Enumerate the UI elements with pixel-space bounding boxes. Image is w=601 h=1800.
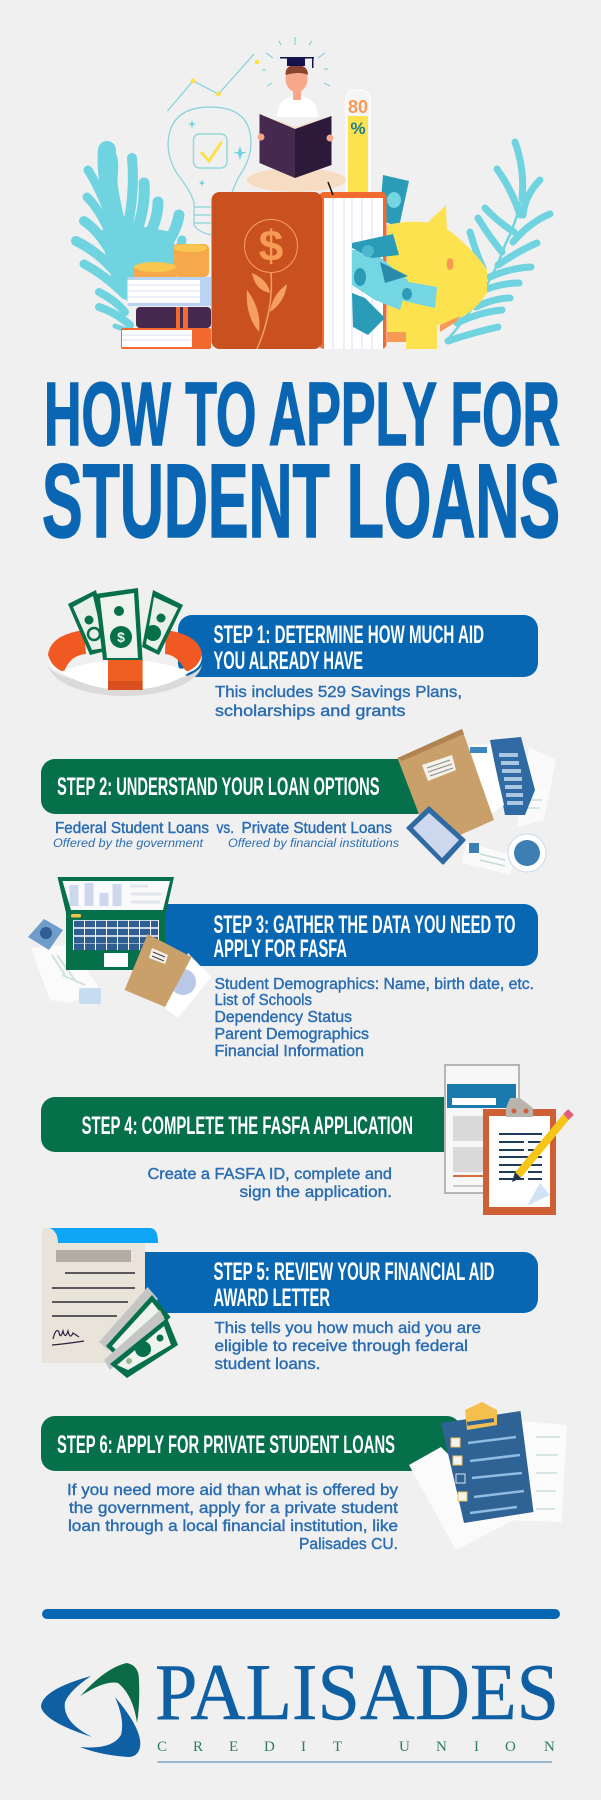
comparison text: Private Student Loans: [242, 820, 392, 837]
body text: the government, apply for a private student: [69, 1500, 399, 1517]
icon: stack of books and coins: [121, 244, 211, 349]
icon: score tube: 80: [348, 97, 368, 117]
body text: student loans.: [214, 1356, 320, 1373]
tagline: CREDITUNION: [157, 1739, 555, 1755]
icon: lightbulb: [168, 107, 251, 235]
heading bar: [145, 1252, 538, 1313]
icon: money bills: [352, 234, 437, 335]
body list: Dependency Status: [214, 1009, 352, 1026]
comparison text: Federal Student Loans: [55, 820, 209, 837]
icon: laptop, badge and folder: [28, 877, 211, 1018]
icon: left plant: [76, 146, 182, 332]
panel: step 6: [41, 1402, 567, 1553]
logo: Palisades Credit Union: [41, 1647, 559, 1762]
panel: step 5: [42, 1228, 538, 1378]
heading bar: STEP 2: UNDERSTAND YOUR LOAN OPTIONS: [57, 773, 380, 801]
icon: score tube: [346, 90, 370, 200]
body text: Palisades CU.: [299, 1536, 398, 1553]
body text: sign the application.: [240, 1184, 392, 1201]
body text: loan through a local financial institution, like: [68, 1518, 398, 1535]
icon: piggy bank: [387, 205, 487, 349]
body text: scholarships and grants: [215, 703, 406, 720]
body text: [148, 1166, 392, 1201]
heading bar: APPLY FOR FASFA: [214, 935, 347, 963]
comparison text: vs.: [216, 820, 234, 837]
body list: Financial Information: [214, 1043, 364, 1060]
wordmark: PALISADES: [155, 1647, 559, 1737]
body list: Student Demographics: Name, birth date, etc.: [214, 976, 534, 993]
body list: Parent Demographics: [214, 1026, 369, 1043]
panel: step 1: [48, 588, 538, 720]
body list: List of Schools: [214, 992, 312, 1009]
body text: If you need more aid than what is offered by: [67, 1482, 398, 1499]
body text: [67, 1482, 399, 1553]
body text: [215, 684, 462, 720]
heading bar: [150, 904, 538, 966]
heading bar: [41, 759, 431, 814]
panel: step 3: [28, 877, 538, 1060]
icon: right plant: [448, 142, 550, 341]
panel: step 2: [41, 729, 556, 875]
body text: Create a FASFA ID, complete and: [148, 1166, 392, 1183]
icon: clipboard checklist: [409, 1402, 567, 1550]
heading bar: [41, 1416, 461, 1471]
icon: award letter with money: [42, 1228, 178, 1378]
heading bar: AWARD LETTER: [214, 1284, 330, 1312]
icon: folder, phone and coffee: [398, 729, 556, 875]
comparison text: Offered by financial institutions: [228, 836, 399, 850]
body text: This tells you how much aid you are: [214, 1320, 481, 1337]
divider bar: [42, 1609, 560, 1619]
title: [42, 365, 560, 560]
tagline rule: [158, 1762, 552, 1763]
icon: student with book: [247, 37, 346, 192]
comparison text: Offered by the government: [53, 836, 204, 850]
heading bar: [178, 615, 538, 677]
body text: This includes 529 Savings Plans,: [215, 684, 462, 701]
icon: browser page and clipboard: [445, 1065, 571, 1215]
body text: eligible to receive through federal: [214, 1338, 468, 1355]
hero illustration: [76, 37, 550, 349]
heading bar: [41, 1097, 445, 1152]
body text: [214, 1320, 481, 1373]
body list: [214, 976, 534, 1060]
icon: rising line chart: [168, 54, 259, 111]
heading bar: YOU ALREADY HAVE: [214, 647, 363, 675]
icon: bill behind book: [380, 175, 409, 227]
icon: life ring with money: [48, 588, 202, 696]
panel: step 4: [41, 1065, 571, 1215]
logo mark: [41, 1663, 140, 1757]
icon: big book with dollar flower: $: [259, 222, 283, 271]
comparison text: [53, 820, 399, 850]
icon: life ring with money: $: [117, 629, 125, 645]
icon: big book with dollar flower: [212, 182, 386, 349]
icon: score tube: %: [350, 119, 366, 138]
